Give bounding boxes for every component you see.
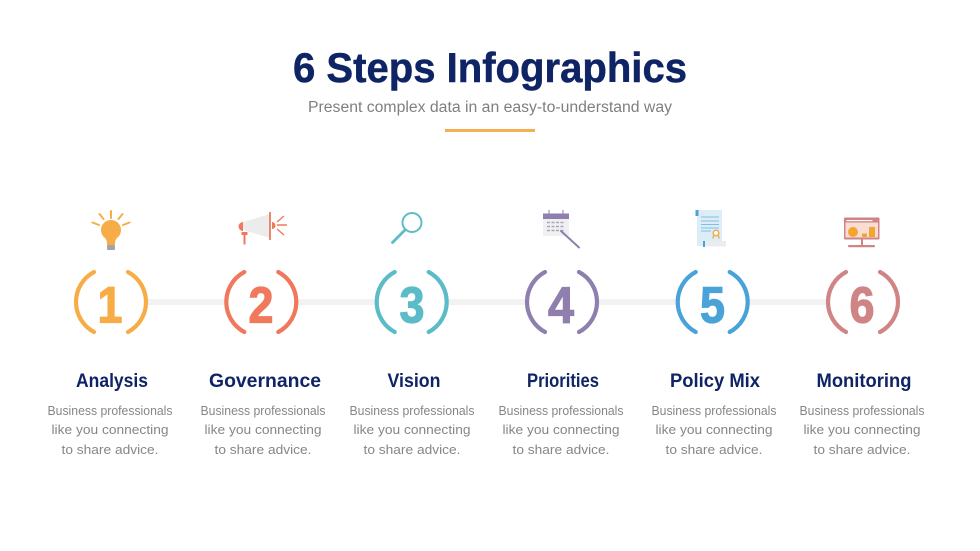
label: Analysis — [76, 371, 148, 392]
icon: certificate scroll — [696, 210, 726, 247]
number ring 2 — [226, 272, 296, 334]
description: like you connecting — [804, 422, 920, 437]
icon: calendar with pen — [543, 210, 579, 248]
number ring 5 — [677, 272, 748, 334]
label: Policy Mix — [670, 371, 760, 392]
description: Business professionals — [498, 403, 624, 418]
title: 6 Steps Infographics — [293, 44, 687, 91]
description: to share advice. — [214, 442, 312, 457]
timeline connector — [148, 299, 828, 305]
icon: monitor with chart — [844, 218, 880, 247]
number ring 1 — [76, 272, 146, 334]
description: to share advice. — [62, 442, 158, 457]
description — [652, 403, 777, 457]
description: like you connecting — [656, 422, 772, 437]
label: Governance — [209, 371, 321, 392]
icon: magnifying glass — [392, 213, 422, 242]
description: Business professionals — [48, 403, 173, 418]
number ring 5: 5 — [700, 276, 725, 334]
description: to share advice. — [364, 442, 460, 457]
description — [350, 403, 475, 457]
description: to share advice. — [512, 442, 610, 457]
description — [48, 403, 173, 457]
description — [498, 403, 624, 457]
number ring 1: 1 — [98, 276, 122, 334]
number ring 4: 4 — [548, 276, 575, 334]
icon: light bulb — [92, 211, 130, 250]
number ring 6: 6 — [850, 276, 874, 334]
description: like you connecting — [52, 422, 168, 437]
icon: megaphone — [238, 212, 287, 244]
step 4: Priorities — [498, 210, 624, 457]
step 6: Monitoring — [800, 218, 925, 457]
title underline — [445, 129, 535, 132]
label: Monitoring — [816, 371, 912, 392]
step 3: Vision — [350, 213, 475, 457]
label: Vision — [388, 371, 440, 392]
description: to share advice. — [666, 442, 762, 457]
description — [200, 403, 326, 457]
description: Business professionals — [350, 403, 475, 418]
number ring 3: 3 — [400, 276, 424, 334]
step 2: Governance — [200, 212, 326, 457]
number ring 6 — [828, 272, 898, 334]
number ring 3 — [376, 272, 447, 334]
description: to share advice. — [814, 442, 910, 457]
description: Business professionals — [800, 403, 925, 418]
step 1: Analysis — [48, 211, 173, 457]
description: like you connecting — [204, 422, 322, 437]
number ring 4 — [527, 272, 597, 334]
subtitle: Present complex data in an easy-to-understand way — [308, 99, 672, 116]
description: like you connecting — [354, 422, 470, 437]
description: Business professionals — [652, 403, 777, 418]
number ring 2: 2 — [248, 276, 274, 334]
description: Business professionals — [200, 403, 326, 418]
description — [800, 403, 925, 457]
description: like you connecting — [502, 422, 620, 437]
step 5: Policy Mix — [652, 210, 777, 457]
label: Priorities — [527, 371, 599, 392]
